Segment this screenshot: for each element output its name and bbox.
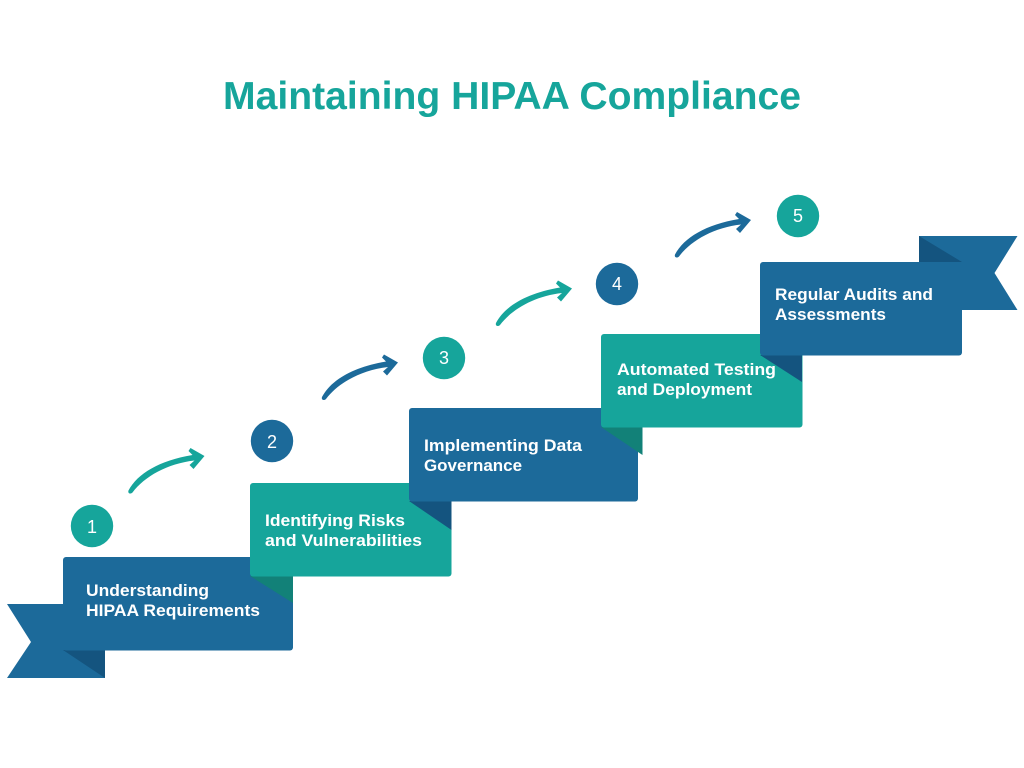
number badge 2: 2 xyxy=(267,432,277,452)
step 3 label: Governance xyxy=(424,456,522,475)
step 3 label: Implementing Data xyxy=(424,436,583,455)
step 4 ribbon xyxy=(601,334,802,455)
arrow 3 to 4 xyxy=(496,280,572,326)
step 1 ribbon xyxy=(7,557,293,678)
step 2 label: Identifying Risks xyxy=(265,511,405,530)
step 1 label: Understanding xyxy=(86,581,209,600)
arrow 4 to 5 xyxy=(675,212,751,258)
step 5 label: Regular Audits and xyxy=(775,285,933,304)
step 1 label: HIPAA Requirements xyxy=(86,601,260,620)
step 5 ribbon xyxy=(760,236,1018,382)
step 3 ribbon xyxy=(409,408,638,530)
step 4 label: and Deployment xyxy=(617,380,752,399)
number badge 5 xyxy=(777,195,819,237)
step 5 label: Assessments xyxy=(775,305,886,324)
number badge 4: 4 xyxy=(612,274,622,294)
number badge 3 xyxy=(423,337,465,379)
arrow 2 to 3 xyxy=(322,354,398,400)
number badge 2 xyxy=(251,420,293,462)
number badge 4 xyxy=(596,263,638,305)
step 4 label: Automated Testing xyxy=(617,360,776,379)
number badge 5: 5 xyxy=(793,206,803,226)
number badge 3: 3 xyxy=(439,348,449,368)
title: Maintaining HIPAA Compliance xyxy=(223,75,801,118)
number badge 1: 1 xyxy=(87,517,97,537)
arrow 1 to 2 xyxy=(128,448,204,494)
number badge 1 xyxy=(71,505,113,547)
step 2 ribbon xyxy=(250,483,452,603)
step 2 label: and Vulnerabilities xyxy=(265,531,422,550)
